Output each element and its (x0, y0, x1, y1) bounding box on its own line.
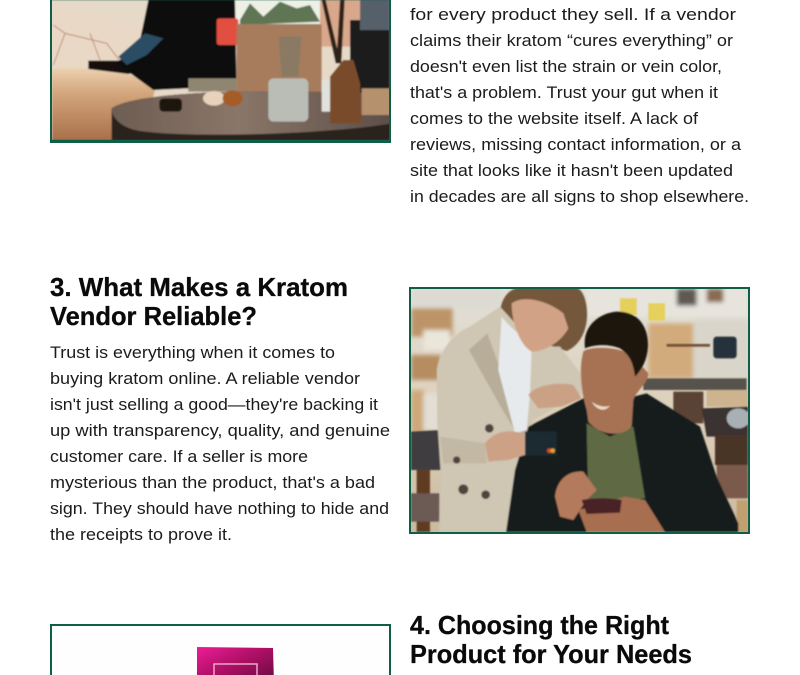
heading: section 4 (410, 610, 692, 669)
woman in trench coat (437, 288, 587, 532)
text block: section 3 body: sign. They should have nothing to hide and (50, 499, 389, 518)
text block: vendor red flags continued: comes to the website itself. A lack of (410, 109, 698, 128)
image: person with laptop at a coffee table (40, 0, 407, 143)
heading: section 3: 3. What Makes a Kratom (50, 272, 348, 302)
image: product package on white (51, 625, 390, 675)
text block: vendor red flags continued: doesn't even list the strain or vein color, (410, 57, 722, 76)
text block: vendor red flags continued: reviews, missing contact information, or a (410, 135, 742, 154)
text block: vendor red flags continued: in decades are all signs to shop elsewhere. (410, 187, 749, 206)
text block: vendor red flags continued (410, 5, 749, 206)
text block: vendor red flags continued: for every product they sell. If a vendor (410, 5, 736, 24)
text block: section 3 body: mysterious than the product, that's a bad (50, 473, 375, 492)
text block: vendor red flags continued: that's a problem. Trust your gut when it (410, 83, 718, 102)
text block: vendor red flags continued: site that looks like it hasn't been updated (410, 161, 733, 180)
image: couple paying online with a credit card (409, 287, 750, 534)
heading: section 4: Product for Your Needs (410, 639, 692, 669)
text block: section 3 body: the receipts to prove it. (50, 525, 232, 544)
text block: section 3 body: up with transparency, quality, and genuine (50, 421, 390, 440)
heading: section 3 (50, 272, 348, 331)
text block: section 3 body: Trust is everything when it comes to (50, 343, 335, 362)
text block: section 3 body: customer care. If a seller is more (50, 447, 308, 466)
text block: vendor red flags continued: claims their kratom “cures everything” or (410, 31, 733, 50)
heading: section 4: 4. Choosing the Right (410, 610, 669, 640)
text block: section 3 body (50, 343, 390, 544)
text block: section 3 body: isn't just selling a good—they're backing it (50, 395, 378, 414)
hands and credit card (485, 384, 665, 532)
text block: section 3 body: buying kratom online. A reliable vendor (50, 369, 360, 388)
heading: section 3: Vendor Reliable? (50, 301, 257, 331)
man in dark jacket (506, 312, 738, 532)
